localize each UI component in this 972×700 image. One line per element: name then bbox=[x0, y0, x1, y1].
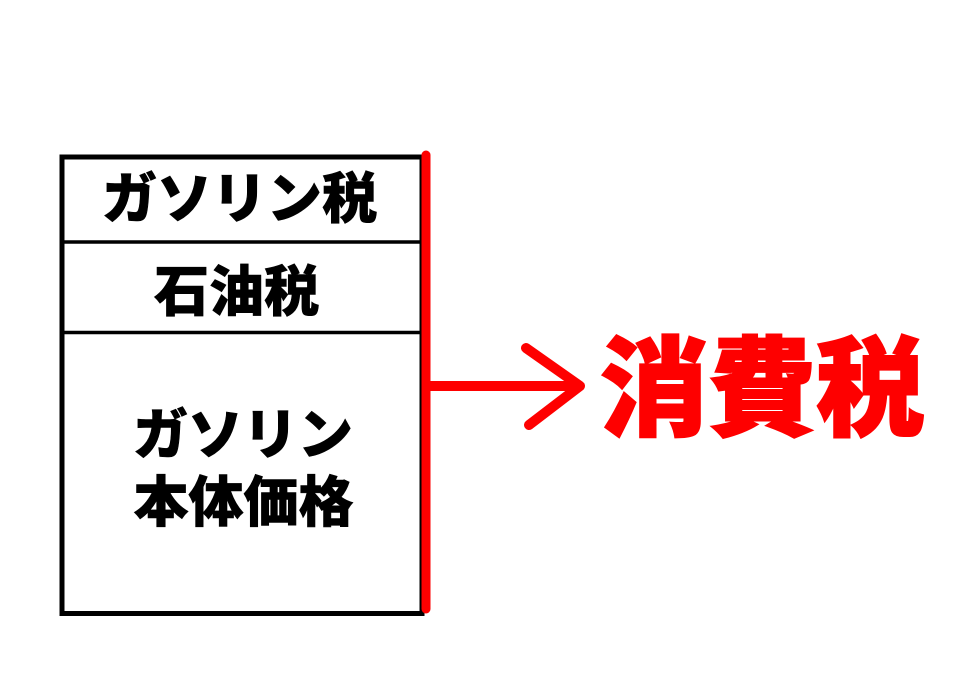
divider: oil tax / base price bbox=[62, 331, 422, 334]
label: gasoline base price bbox=[133, 404, 354, 534]
box outline bbox=[62, 157, 422, 614]
red bracket line bbox=[422, 155, 430, 609]
label: gasoline tax: ガソリン税 bbox=[102, 168, 377, 230]
label: gasoline base price: ガソリン bbox=[133, 404, 353, 466]
divider: gasoline tax / oil tax bbox=[62, 240, 422, 244]
arrow bbox=[430, 348, 580, 425]
label: oil tax: 石油税 bbox=[154, 261, 319, 323]
label: gasoline base price: 本体価格 bbox=[133, 472, 354, 534]
label: consumption tax: 消費税 bbox=[600, 329, 924, 450]
price breakdown box bbox=[62, 157, 422, 614]
